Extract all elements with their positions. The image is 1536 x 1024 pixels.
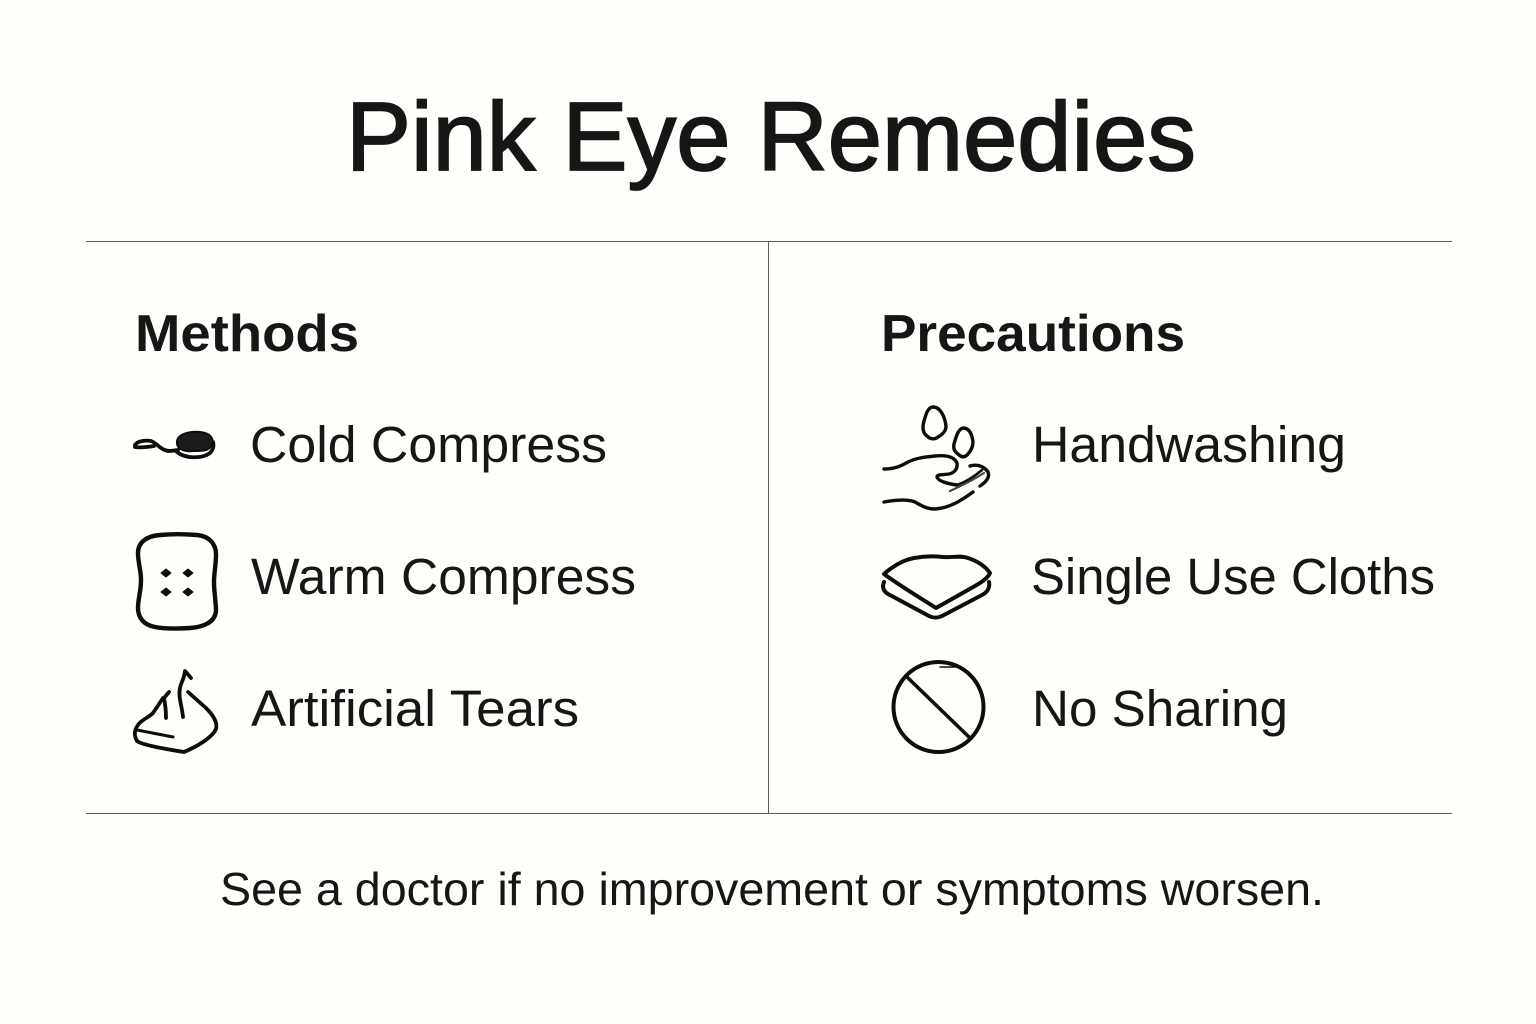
panel: methods — [135, 305, 636, 752]
panel: precautions — [881, 305, 1435, 752]
label: single use cloths: Single Use Cloths — [1031, 548, 1435, 605]
heading: precautions: Precautions — [881, 305, 1185, 363]
icon: artificial tears — [135, 671, 216, 752]
label: cold compress: Cold Compress — [250, 416, 607, 473]
icon: single use cloths — [883, 556, 990, 618]
label: warm compress: Warm Compress — [251, 548, 636, 605]
icon: warm compress — [138, 534, 216, 629]
icon: cold compress — [135, 432, 213, 457]
title: Pink Eye Remedies — [346, 82, 1196, 191]
label: no sharing: No Sharing — [1032, 680, 1288, 737]
label: handwashing: Handwashing — [1032, 416, 1346, 473]
footer note: See a doctor if no improvement or symptoms worsen. — [220, 863, 1324, 915]
label: artificial tears: Artificial Tears — [251, 680, 579, 737]
heading: methods: Methods — [135, 305, 359, 363]
icon: handwashing — [884, 407, 989, 509]
icon: no sharing — [894, 662, 984, 752]
